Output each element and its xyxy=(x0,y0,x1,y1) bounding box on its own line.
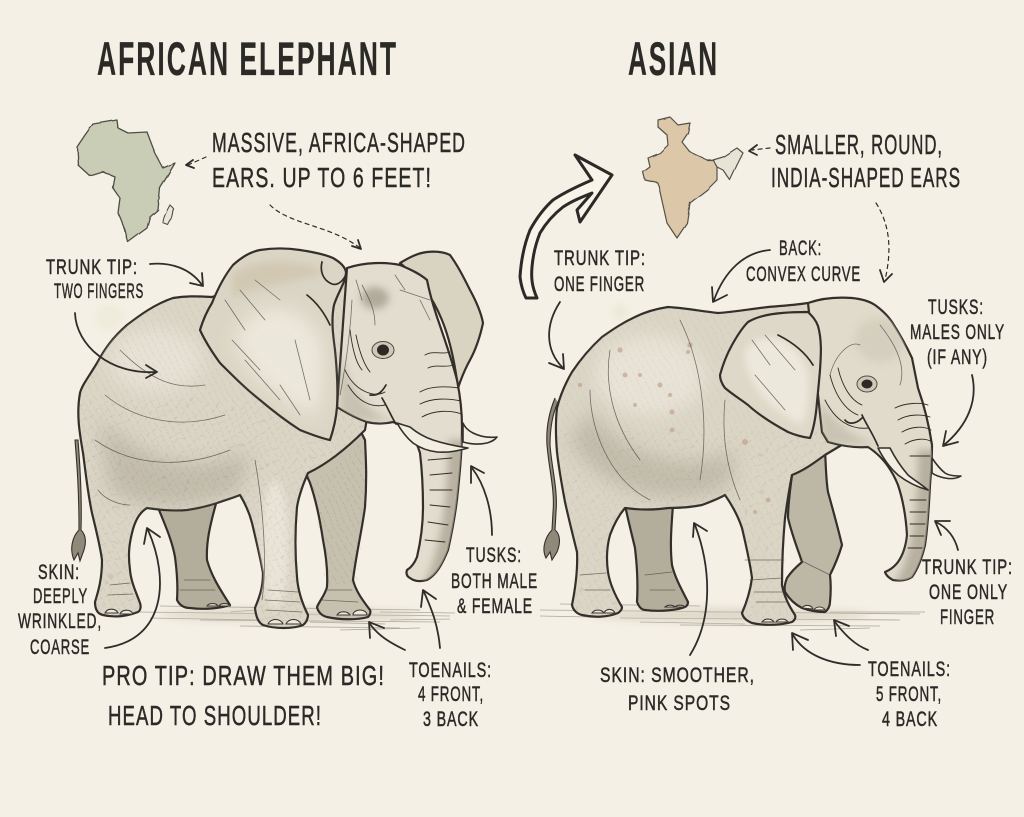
map: Africa xyxy=(77,120,175,242)
label: African toenails xyxy=(409,658,492,731)
label: pro tip: HEAD TO SHOULDER! xyxy=(108,700,322,731)
label: African tusks: & FEMALE xyxy=(457,594,533,618)
label: African skin: WRINKLED, xyxy=(18,609,102,633)
body with near legs xyxy=(78,270,370,628)
label: Asian skin xyxy=(600,663,755,715)
label: African skin xyxy=(18,560,102,659)
tail xyxy=(544,398,559,560)
label: Asian trunk tip: ONE FINGER xyxy=(554,272,645,296)
label: Asian trunk tip: TRUNK TIP: xyxy=(554,246,646,270)
ground sketch lines xyxy=(140,606,455,630)
label: African skin: SKIN: xyxy=(38,560,80,584)
annotation arrows xyxy=(75,145,974,665)
pink spots xyxy=(578,342,770,514)
far front leg xyxy=(305,420,370,619)
tail xyxy=(72,440,85,561)
label: Asian skin: SKIN: SMOOTHER, xyxy=(600,663,755,687)
label: Asian back: CONVEX CURVE xyxy=(746,262,861,286)
label: African toenails: TOENAILS: xyxy=(409,658,492,682)
label: African trunk tip xyxy=(46,255,144,303)
label: Asian skin: PINK SPOTS xyxy=(628,691,731,715)
head washes xyxy=(820,318,940,590)
title: African elephant: AFRICAN ELEPHANT xyxy=(97,32,398,85)
ear washes xyxy=(235,307,324,418)
label: African trunk tip: TRUNK TIP: xyxy=(46,255,138,279)
label: African tusks xyxy=(451,543,538,618)
label: African ears xyxy=(212,127,466,193)
label: Asian tusks: (IF ANY) xyxy=(927,345,988,369)
body with near legs xyxy=(556,303,850,625)
label: African ears: EARS. UP TO 6 FEET! xyxy=(212,162,432,193)
label: Asian tusks: TUSKS: xyxy=(928,295,984,319)
title: Asian: ASIAN xyxy=(628,32,719,85)
map: India xyxy=(643,117,743,238)
label: Asian back: BACK: xyxy=(779,236,822,260)
body washes and hatching xyxy=(557,306,836,624)
far leg hatching xyxy=(310,445,365,587)
ground sketch lines xyxy=(540,604,925,630)
label: pro tip xyxy=(102,660,385,731)
eye xyxy=(857,376,877,392)
label: Asian tusks xyxy=(910,295,1005,369)
far back leg xyxy=(625,505,688,611)
large ear xyxy=(200,248,346,440)
wrinkles xyxy=(580,320,902,602)
label: Asian toenails xyxy=(868,657,951,731)
label: African tusks: BOTH MALE xyxy=(451,569,538,593)
label: Asian ears xyxy=(771,129,961,193)
far back leg xyxy=(157,500,230,609)
label: African tusks: TUSKS: xyxy=(466,543,522,567)
tusks xyxy=(397,423,497,452)
label: Asian back xyxy=(746,236,861,286)
label: African ears: MASSIVE, AFRICA-SHAPED xyxy=(212,127,466,158)
label: Asian trunk tip lower xyxy=(922,555,1013,629)
label: African skin: DEEPLY xyxy=(33,584,88,608)
head washes xyxy=(340,287,470,590)
toenails xyxy=(592,605,825,622)
label: Asian toenails: 4 BACK xyxy=(882,707,938,731)
body washes and hatching xyxy=(80,287,363,626)
label: Asian trunk tip xyxy=(554,246,646,296)
label: African trunk tip: TWO FINGERS xyxy=(54,279,144,303)
head and trunk xyxy=(808,298,932,581)
label: Asian toenails: TOENAILS: xyxy=(868,657,951,681)
label: pro tip: PRO TIP: DRAW THEM BIG! xyxy=(102,660,385,691)
ear xyxy=(720,312,821,438)
eye xyxy=(372,342,394,358)
far front leg xyxy=(785,450,842,612)
wrinkles xyxy=(95,350,358,612)
toenails xyxy=(105,604,367,624)
big arrow xyxy=(520,155,612,298)
African elephant illustration xyxy=(60,248,497,640)
far ear xyxy=(400,252,483,388)
label: African toenails: 4 FRONT, xyxy=(418,682,484,706)
Asian elephant illustration xyxy=(540,290,961,640)
label: African skin: COARSE xyxy=(30,635,90,659)
label: African toenails: 3 BACK xyxy=(423,707,479,731)
head and trunk xyxy=(337,263,462,581)
tusks xyxy=(878,448,961,490)
label: Asian toenails: 5 FRONT, xyxy=(876,682,942,706)
